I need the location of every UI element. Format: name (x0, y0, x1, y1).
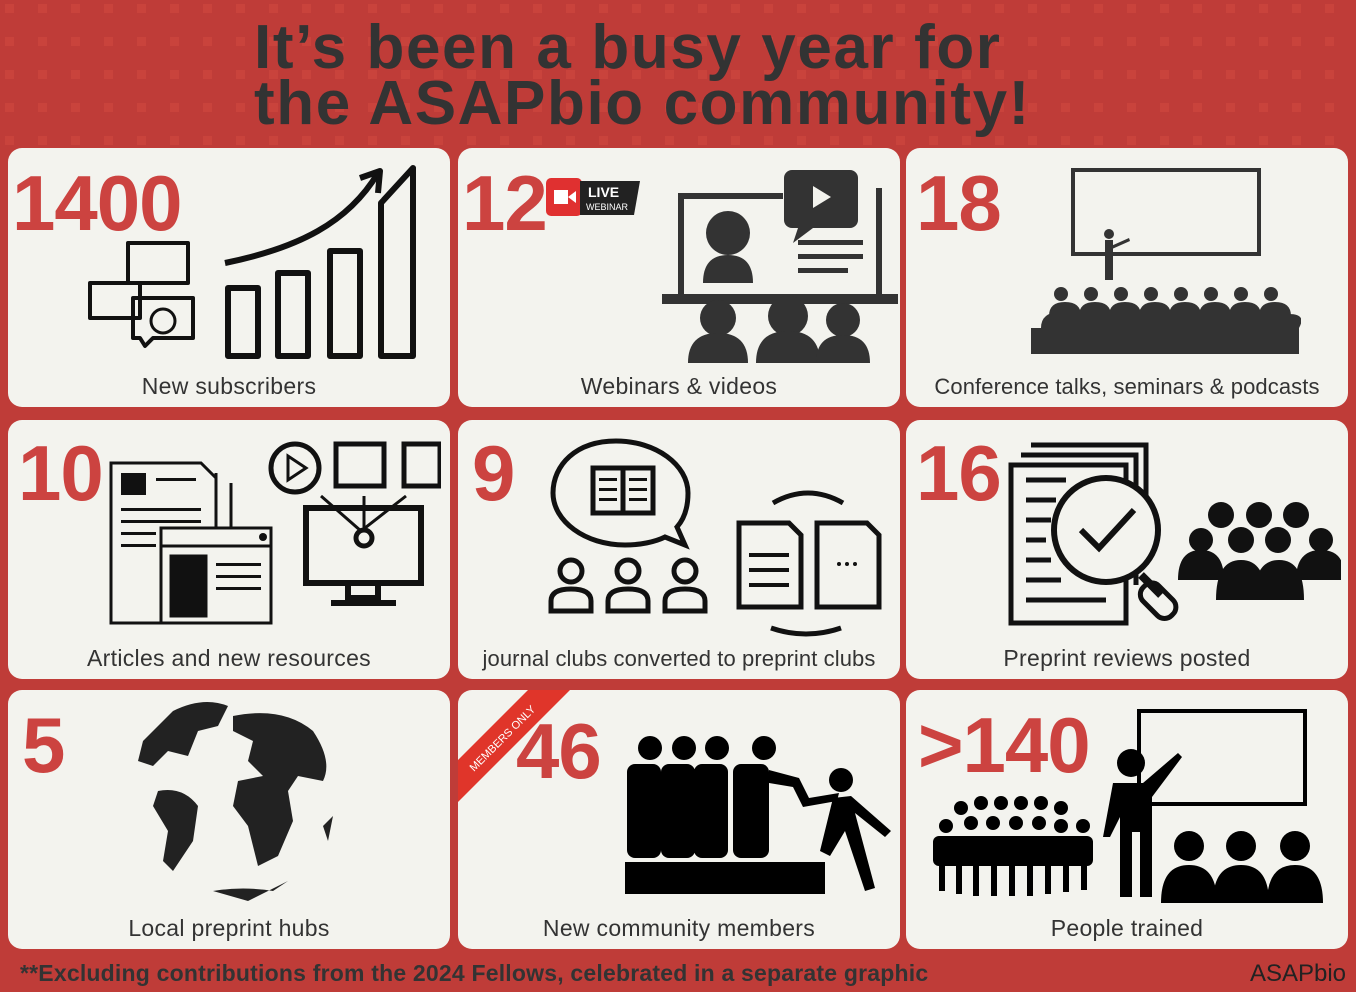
label: Webinars & videos (581, 373, 777, 399)
title: It’s been a busy year for (254, 13, 1002, 82)
number: 10: 10 (18, 429, 103, 517)
number: 46: 46 (516, 707, 601, 795)
footnote: **Excluding contributions from the 2024 Fellows, celebrated in a separate graphic (20, 960, 928, 986)
panel: articles (8, 420, 450, 679)
label: Preprint reviews posted (1003, 645, 1251, 671)
icon: growth chart (88, 165, 416, 359)
panel: webinars (458, 148, 900, 407)
ribbon: members only (458, 690, 570, 802)
number: 18: 18 (916, 159, 1001, 247)
panel: subscribers (8, 148, 450, 407)
icon: speech bubble with book and people (548, 438, 882, 636)
panel: local hubs (8, 690, 450, 949)
number: 1400: 1400 (12, 159, 182, 247)
icon: live webinar badge: LIVE (588, 184, 619, 200)
icon: lecture hall (1031, 168, 1301, 354)
panel: people trained (906, 690, 1348, 949)
number: >140: >140 (918, 701, 1090, 789)
label: People trained (1051, 915, 1203, 941)
number: 12: 12 (462, 159, 547, 247)
number: 16: 16 (916, 429, 1001, 517)
panel: journal clubs (458, 420, 900, 679)
icon: video screen with audience (662, 170, 898, 363)
label: New community members (543, 915, 815, 941)
brand: ASAPbio: ASAPbio (1250, 960, 1346, 987)
icon: globe (138, 702, 333, 901)
number: 9: 9 (472, 429, 514, 517)
label: Conference talks, seminars & podcasts (934, 374, 1320, 399)
panel: conference talks (906, 148, 1348, 407)
label: journal clubs converted to preprint clubs (482, 646, 875, 671)
title (254, 13, 1031, 138)
icon: people helping climber (625, 736, 891, 894)
number: 5: 5 (22, 701, 64, 789)
label: Articles and new resources (87, 645, 371, 671)
label: New subscribers (142, 373, 316, 399)
title: the ASAPbio community! (254, 69, 1031, 138)
label: Local preprint hubs (128, 915, 330, 941)
icon: live webinar badge: WEBINAR (586, 202, 629, 212)
icon: documents and media (110, 442, 441, 624)
ribbon: members only: MEMBERS ONLY (468, 703, 539, 774)
panel: preprint reviews (906, 420, 1348, 679)
panel: community members (458, 690, 900, 949)
icon: live webinar badge (546, 178, 640, 216)
icon: documents with magnifier and crowd (1008, 442, 1341, 626)
icon: trainer with audience (933, 709, 1323, 903)
